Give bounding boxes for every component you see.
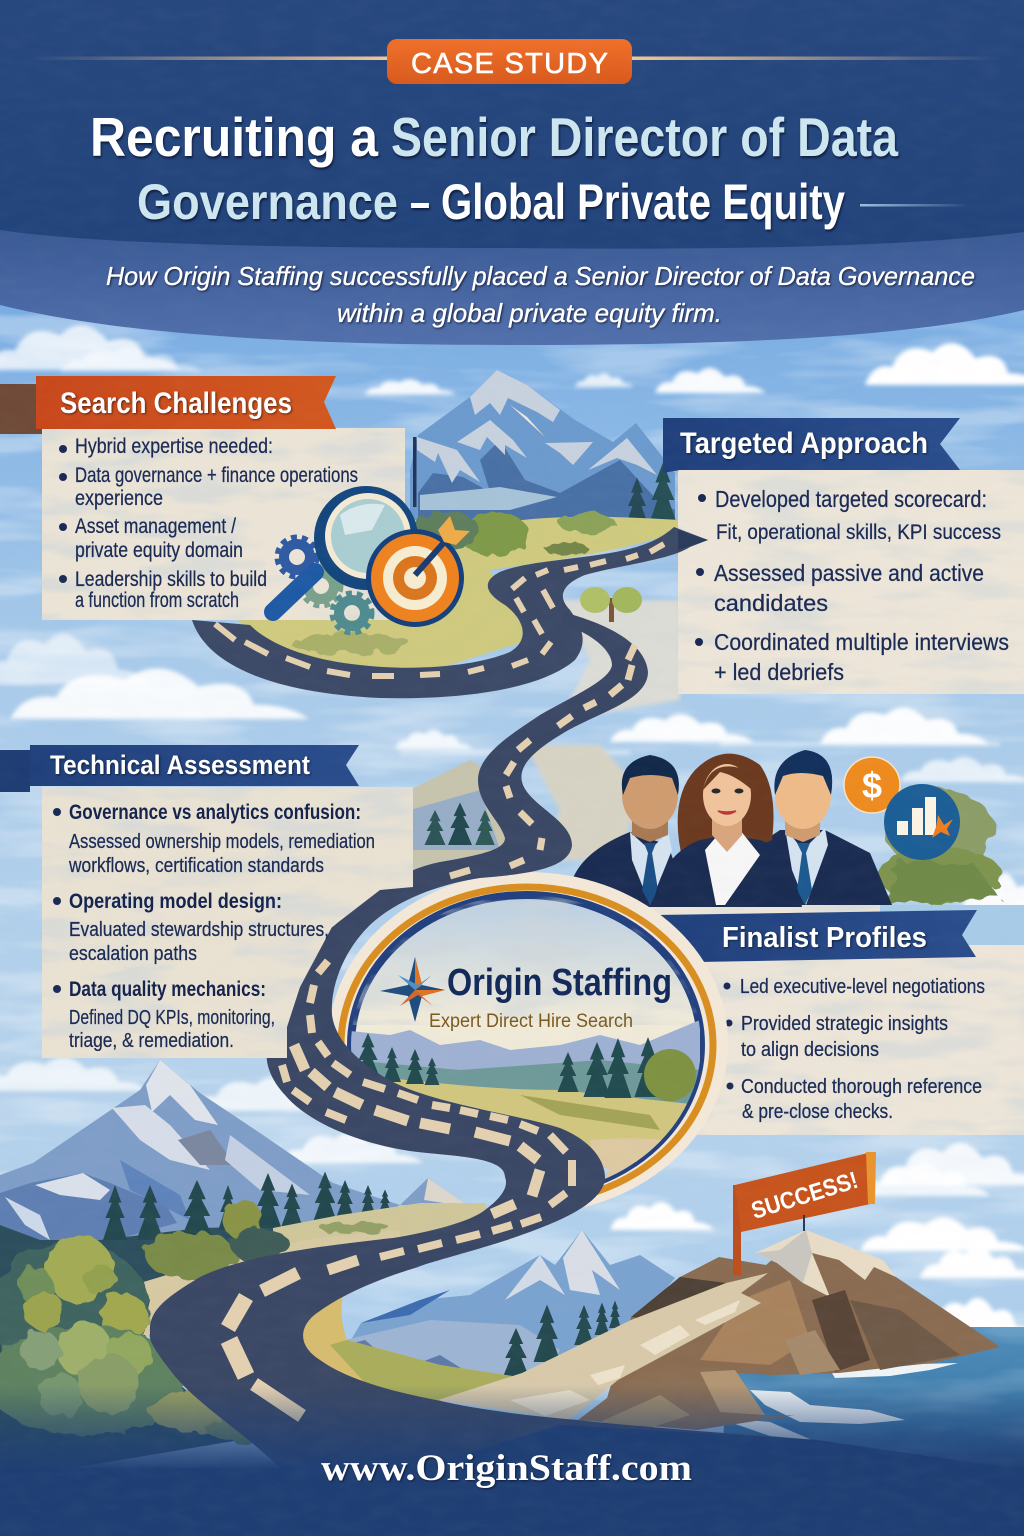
banner xyxy=(663,418,960,473)
banner xyxy=(0,750,30,792)
body text: Conducted thorough reference xyxy=(741,1076,982,1098)
icon: dollar coin xyxy=(844,757,900,813)
middle mountains xyxy=(296,1230,675,1402)
icon: search, gears and target xyxy=(273,486,470,633)
body text: Operating model design: xyxy=(69,890,282,913)
panel: targeted approach xyxy=(663,418,1024,694)
clouds xyxy=(0,325,1024,1337)
body text: Hybrid expertise needed: xyxy=(75,435,273,458)
icon: target with arrow xyxy=(366,516,470,627)
title: Senior Director of Data xyxy=(391,106,898,168)
paper xyxy=(42,428,405,620)
panel: search challenges xyxy=(0,376,405,620)
header band xyxy=(0,0,1024,249)
case study tag xyxy=(30,39,1002,84)
pale hills under people xyxy=(525,745,640,860)
body text xyxy=(714,486,1009,685)
body text: private equity domain xyxy=(75,539,243,562)
body text: Developed targeted scorecard: xyxy=(715,486,987,512)
banner xyxy=(657,910,977,962)
body text: Asset management / xyxy=(75,515,236,538)
icon: compass star xyxy=(380,957,445,1022)
heading: Search Challenges xyxy=(60,387,292,420)
roadside ground xyxy=(140,1203,490,1335)
icon: magnifying glass xyxy=(273,486,418,612)
subtitle: How Origin Staffing successfully placed a Senior Director of Data Governance xyxy=(106,261,975,291)
body text: candidates xyxy=(714,590,828,616)
title: Recruiting a xyxy=(90,106,378,168)
body text: escalation paths xyxy=(69,943,197,965)
bottom fade xyxy=(0,1385,1024,1536)
body text xyxy=(740,976,985,1123)
bottom left mountains xyxy=(0,1060,470,1480)
path to summit xyxy=(438,1273,768,1420)
body text: Governance vs analytics confusion: xyxy=(69,801,361,824)
paper xyxy=(640,905,1024,1135)
banner xyxy=(36,376,336,429)
body text: Evaluated stewardship structures, xyxy=(69,919,329,941)
body text: Leadership skills to build xyxy=(75,568,267,591)
sky background xyxy=(0,300,1024,1500)
tree beside road xyxy=(580,587,642,622)
body text: workflows, certification standards xyxy=(68,855,324,877)
title: – xyxy=(410,174,430,230)
footer url: www.OriginStaff.com xyxy=(321,1448,692,1489)
ring scenery xyxy=(351,896,700,1179)
logo ring xyxy=(328,872,728,1214)
icon: dollar coin: $ xyxy=(862,765,882,806)
heading: Technical Assessment xyxy=(50,750,310,780)
bullets xyxy=(724,982,734,1090)
body text xyxy=(75,435,358,612)
logo wordmark: Origin Staffing xyxy=(447,962,672,1004)
body text: Data quality mechanics: xyxy=(69,978,266,1001)
success flag: SUCCESS! xyxy=(748,1167,861,1225)
bushes top meadow xyxy=(290,511,615,653)
paper xyxy=(42,787,413,1058)
mountains top xyxy=(410,370,677,525)
bush behind icons xyxy=(878,790,1002,905)
body text: to align decisions xyxy=(741,1039,879,1061)
body text: & pre-close checks. xyxy=(742,1101,893,1123)
bullets xyxy=(695,494,706,646)
pale ground beside road xyxy=(560,600,680,720)
heading: Finalist Profiles xyxy=(722,922,927,954)
body text xyxy=(68,801,375,1052)
body text: Assessed ownership models, remediation xyxy=(69,831,375,853)
hills behind technical assessment xyxy=(410,760,540,870)
road: upper section xyxy=(192,527,708,698)
title: Global Private Equity xyxy=(441,174,845,230)
panel: technical assessment xyxy=(0,745,413,1058)
woman xyxy=(653,754,802,907)
success flag xyxy=(733,1152,876,1275)
body text: Fit, operational skills, KPI success xyxy=(716,521,1001,544)
rock island xyxy=(578,1230,1000,1430)
logo wordmark: Expert Direct Hire Search xyxy=(429,1011,633,1032)
title: Governance xyxy=(137,174,398,230)
people: three finalists xyxy=(573,750,892,907)
road pointer to targeted panel xyxy=(678,530,708,550)
panel: finalist profiles xyxy=(640,905,1024,1135)
sea foam xyxy=(715,1363,958,1440)
bullets xyxy=(59,445,67,583)
body text: Assessed passive and active xyxy=(714,560,984,586)
bullets xyxy=(53,808,61,993)
subtitle xyxy=(106,261,975,328)
road dashes xyxy=(215,544,664,1416)
body text: Provided strategic insights xyxy=(741,1013,948,1035)
case study tag: CASE STUDY xyxy=(411,48,608,80)
yellow verge along road xyxy=(296,1288,525,1402)
right man xyxy=(765,750,892,905)
left man xyxy=(573,755,690,907)
logo wordmark xyxy=(380,957,672,1032)
body text: triage, & remediation. xyxy=(69,1030,234,1052)
body text: Defined DQ KPIs, monitoring, xyxy=(69,1007,275,1029)
subtitle band xyxy=(0,230,1024,345)
body text: + led debriefs xyxy=(714,659,844,685)
heading: Targeted Approach xyxy=(680,427,928,460)
summit path markings xyxy=(510,1300,740,1416)
body text: a function from scratch xyxy=(75,589,239,612)
brown banner stub xyxy=(0,384,46,434)
paper xyxy=(678,470,1024,694)
sea xyxy=(720,1327,1024,1490)
subtitle: within a global private equity firm. xyxy=(337,298,722,328)
body text: Data governance + finance operations xyxy=(75,464,358,487)
icon: gears xyxy=(277,537,372,633)
road: main winding section xyxy=(150,612,900,1490)
meadow under first road xyxy=(230,517,680,680)
bushes bottom left xyxy=(0,1200,305,1443)
body text: Led executive-level negotiations xyxy=(740,976,985,998)
icon: chart badge xyxy=(884,784,960,860)
title xyxy=(90,106,970,230)
body text: experience xyxy=(75,487,163,510)
